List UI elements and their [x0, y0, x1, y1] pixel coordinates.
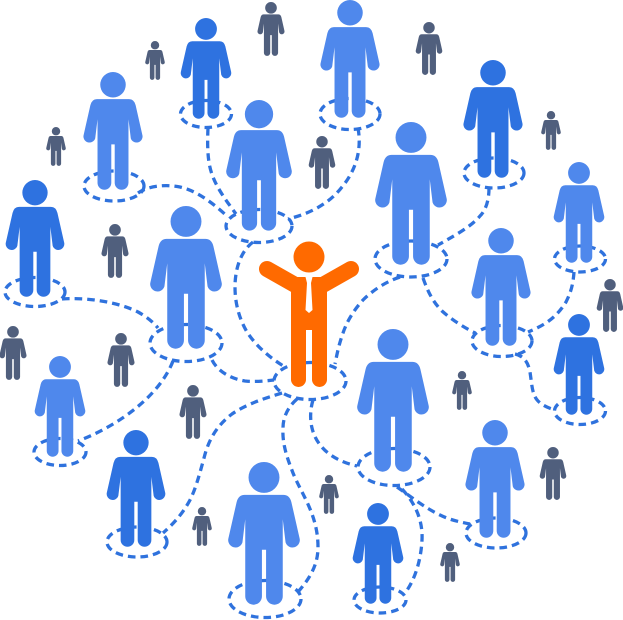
- orange central figure with tie: [267, 242, 351, 387]
